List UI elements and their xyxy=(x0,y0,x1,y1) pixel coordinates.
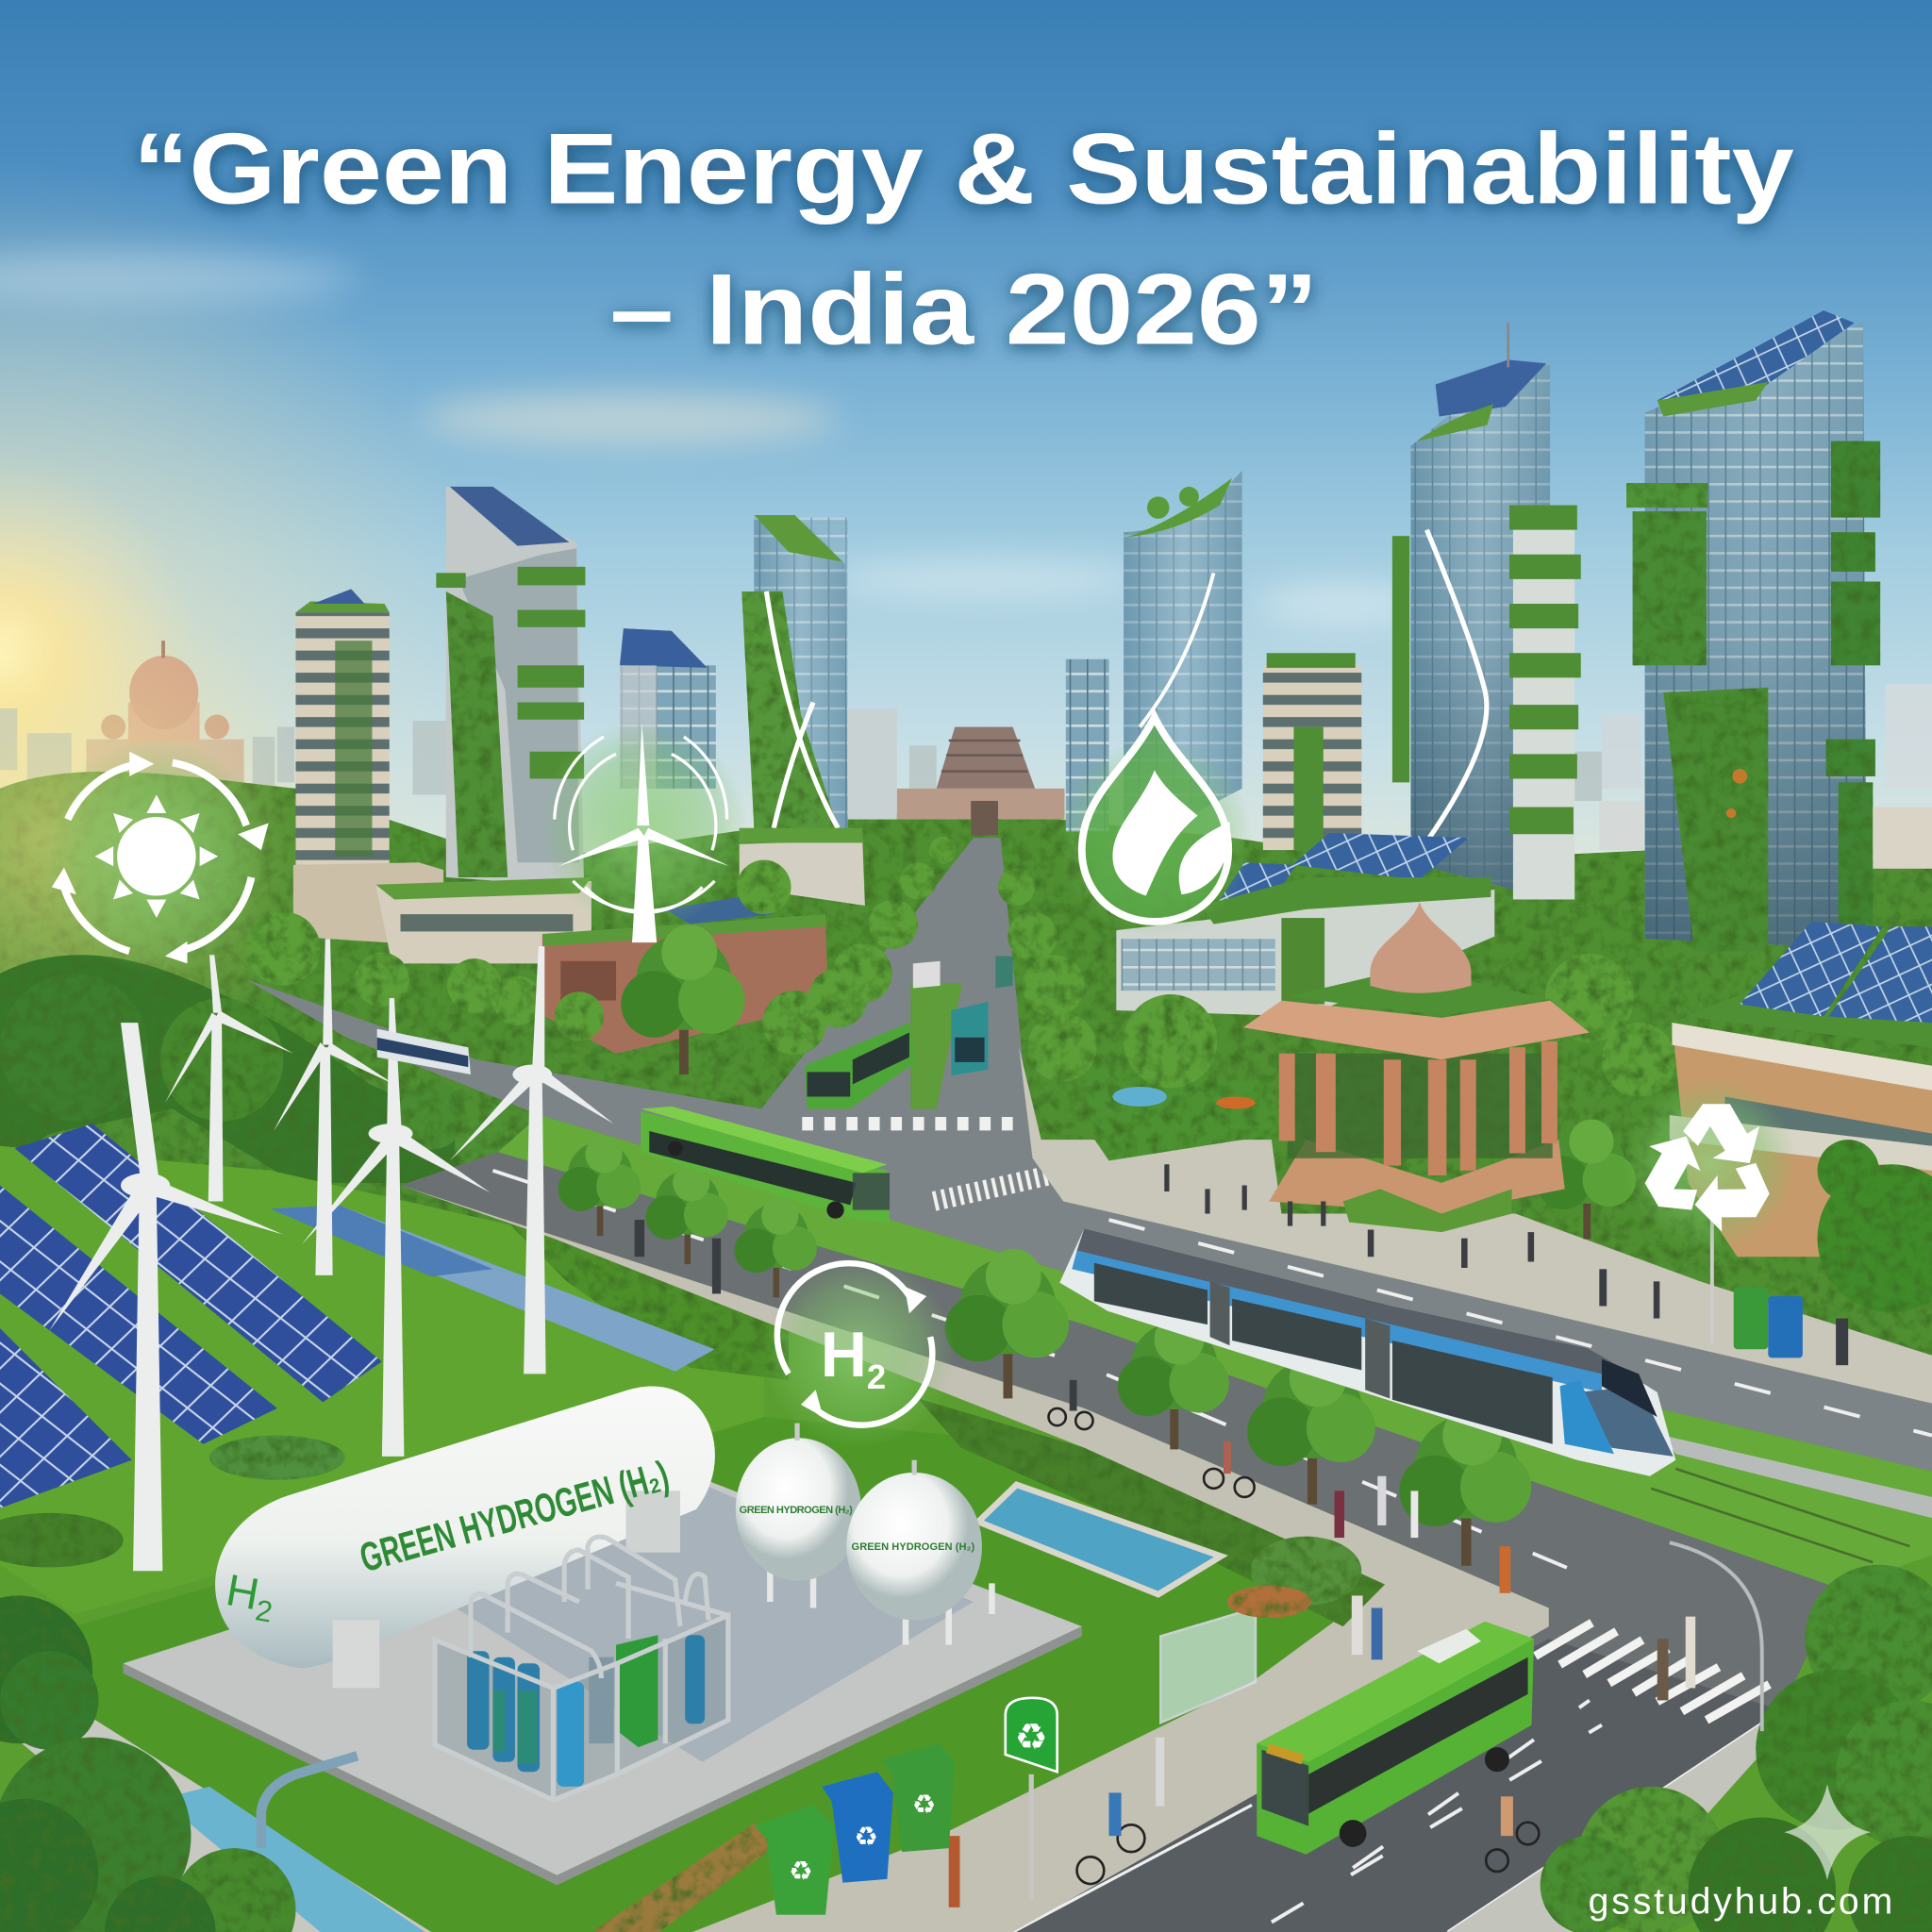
icon: sun with circular arrows xyxy=(40,740,274,974)
green city bus foreground xyxy=(1257,1622,1534,1855)
articulated green bus xyxy=(641,1107,890,1223)
tower: mid with solar roof xyxy=(620,628,716,789)
tower: glass spiral with balconies xyxy=(1392,323,1581,899)
tank label: GREEN HYDROGEN (H₂) xyxy=(355,1453,674,1581)
icon: sparkle watermark xyxy=(1784,1784,1871,1880)
warm light on trees xyxy=(0,567,321,1109)
tower: slim beside gopuram xyxy=(1066,659,1109,832)
low building far right xyxy=(1599,801,1932,869)
turbine 3 xyxy=(450,946,613,1374)
grass field left xyxy=(0,1146,789,1614)
green podium building with solar xyxy=(1116,833,1494,1017)
planters and flower beds xyxy=(591,1537,1361,1932)
turbine 5 xyxy=(165,955,293,1201)
right edge trees xyxy=(1818,1140,1932,1312)
title xyxy=(133,112,1794,365)
water pool xyxy=(978,1485,1221,1594)
icon: H2 hydrogen: H xyxy=(821,1320,867,1391)
temple gopuram xyxy=(897,727,1064,836)
tower: concrete with roof garden xyxy=(1263,653,1361,850)
recycling bins foreground and sign: ♻ xyxy=(1015,1718,1048,1758)
tower: green wall twist xyxy=(375,487,591,963)
tree belts along avenue xyxy=(246,837,1675,1096)
recycling bins foreground and sign: ♻ xyxy=(912,1790,936,1821)
tree belt mid-distance xyxy=(0,772,1932,1932)
spherical storage vessels xyxy=(736,1424,991,1645)
heritage domed building left xyxy=(86,641,244,789)
turbine 2 xyxy=(302,998,491,1457)
tower: glass hourglass xyxy=(740,515,897,906)
bus shelter xyxy=(1160,1607,1256,1723)
icon: water drop with leaf xyxy=(1056,717,1253,937)
electrolyzer units xyxy=(435,1537,728,1800)
blue and white tram xyxy=(1059,1228,1675,1476)
tram corridor grass xyxy=(498,1115,1932,1589)
right side building with solar xyxy=(1670,922,1932,1257)
turbine 1 front xyxy=(49,1023,283,1571)
title: – India 2026” xyxy=(610,252,1319,365)
upper road and avenue xyxy=(246,838,1932,1472)
lower road xyxy=(400,1152,1932,1932)
plaza sidewalk right xyxy=(1019,1047,1932,1404)
icon: H2 hydrogen: 2 xyxy=(867,1357,886,1396)
walkway along road xyxy=(400,1185,1549,1932)
pedestrians and cyclists xyxy=(635,1164,1848,1907)
crosswalks at intersection xyxy=(802,1124,1059,1201)
tower: tall right with vertical gardens and solar roof xyxy=(1626,310,1880,951)
spherical storage vessels: GREEN HYDROGEN (H₂) xyxy=(852,1541,974,1553)
water channel xyxy=(160,1787,425,1932)
trees along the road xyxy=(558,924,1636,1566)
tank H2 mark: 2 xyxy=(253,1593,275,1629)
foreground trees right xyxy=(1541,1565,1932,1932)
hydrogen plant grass xyxy=(0,1417,1385,1932)
foreground trees left xyxy=(0,1595,295,1932)
water pipe xyxy=(261,1756,358,1848)
solar panel arrays xyxy=(0,1124,715,1508)
icon: wind turbine xyxy=(539,721,748,942)
recycling bins foreground and sign: ♻ xyxy=(789,1857,813,1887)
street lamp xyxy=(1670,1542,1762,1731)
concrete plant platform xyxy=(124,1478,1082,1885)
wind turbines group xyxy=(49,939,613,1571)
pavilion (chhatri) xyxy=(1243,902,1590,1232)
recycling bins foreground and sign xyxy=(754,1698,1058,1915)
sky background xyxy=(0,0,1932,1232)
title: “Green Energy & Sustainability xyxy=(133,112,1794,225)
tank H2 mark: H xyxy=(223,1564,263,1619)
brick building xyxy=(542,897,828,1054)
recycling bins right xyxy=(1710,1214,1803,1357)
tower: far left concrete xyxy=(293,589,443,946)
turbine 4 xyxy=(274,939,394,1275)
website watermark: gsstudyhub.com xyxy=(1589,1881,1892,1922)
sphere labels: GREEN HYDROGEN (H₂) xyxy=(740,1505,853,1516)
left forest xyxy=(0,955,530,1183)
icon: H2 hydrogen xyxy=(762,1256,955,1448)
green hydrogen storage tank xyxy=(215,1387,715,1688)
ground base xyxy=(0,1232,1932,1932)
avenue bus and white coach xyxy=(377,957,1013,1075)
icon: recycling arrows xyxy=(1624,1078,1796,1251)
recycling bins foreground and sign: ♻ xyxy=(854,1823,878,1853)
green bus on avenue xyxy=(805,1023,915,1109)
tower: curved glass xyxy=(1124,471,1242,850)
distant skyline xyxy=(0,684,1932,801)
